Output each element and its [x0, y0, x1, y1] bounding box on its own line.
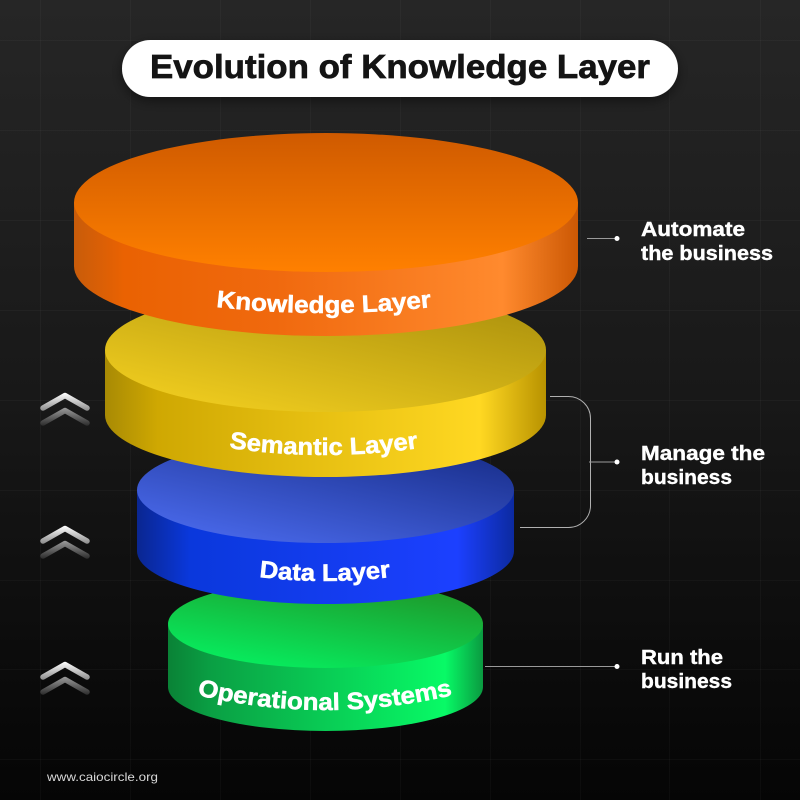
layer: Data Layer — [137, 460, 514, 604]
layer: Operational Systems — [168, 594, 483, 731]
layer: Knowledge Layer: Knowledge Layer — [217, 290, 430, 318]
label: manage the business: Manage the — [641, 443, 765, 465]
layer: Semantic Layer — [105, 314, 546, 477]
label: manage the business: business — [641, 467, 732, 489]
footer url: www.caiocircle.org — [46, 770, 158, 784]
layer: Knowledge Layer — [74, 133, 578, 336]
icon: chevrons up 3 — [43, 664, 87, 692]
layer: Data Layer: Data Layer — [260, 560, 390, 586]
label: run the business: business — [641, 671, 732, 693]
connector: manage bracket — [520, 396, 620, 528]
title: Evolution of Knowledge Layer — [150, 48, 650, 85]
layer: Operational Systems: Operational Systems — [199, 680, 452, 714]
label: automate the business: the business — [641, 243, 773, 265]
icon: chevrons up 2 — [43, 528, 87, 556]
layer: Semantic Layer: Semantic Layer — [230, 432, 417, 458]
label: run the business: Run the — [641, 647, 723, 669]
icon: chevrons up 1 — [43, 396, 87, 423]
label: automate the business: Automate — [641, 219, 745, 241]
title — [122, 40, 678, 97]
connector: run — [485, 664, 620, 669]
connector: automate — [587, 236, 620, 241]
